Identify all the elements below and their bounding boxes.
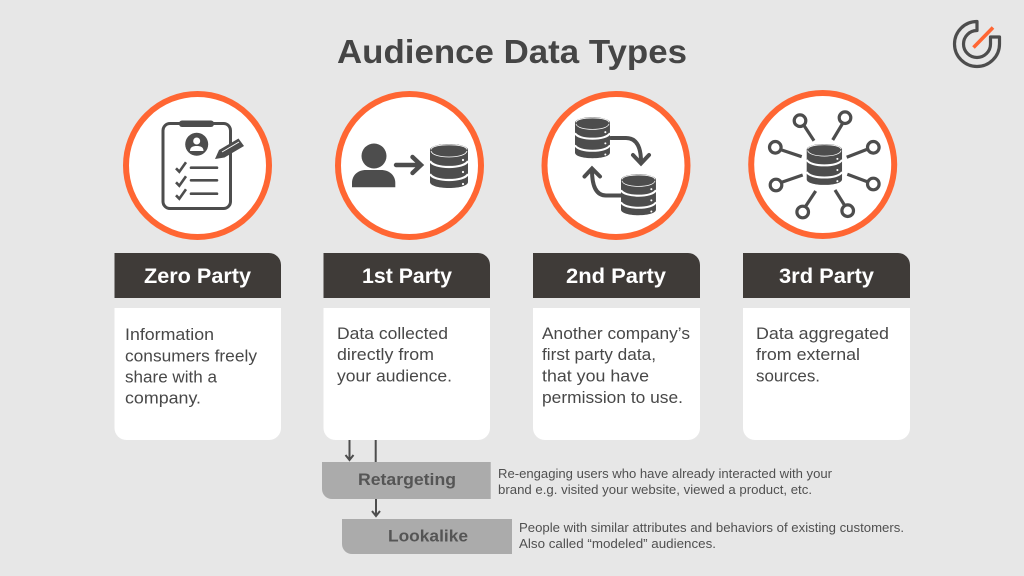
panel: lookalike [342,519,512,554]
text block: lookalike description: People with similar attributes and behaviors of existing customers. [519,521,904,535]
text block: 1st party description: Data collected [337,325,448,343]
text block: lookalike description: Also called “modeled” audiences. [519,537,716,551]
arrow: retargeting to lookalike [372,499,380,516]
heading: zero party: Zero Party [144,265,251,288]
title: Audience Data Types [337,33,687,70]
text block: 2nd party description: Another company’s [542,325,690,343]
heading: 3rd party [743,253,910,298]
text block: 3rd party description: Data aggregated [756,325,889,343]
text block: 2nd party description: permission to use. [542,389,683,407]
text block: retargeting description: brand e.g. visited your website, viewed a product, etc. [498,483,812,497]
text block: zero party description: company. [125,390,201,408]
text block: zero party description: share with a [125,369,218,387]
text block: 2nd party description: that you have [542,368,649,386]
panel: retargeting [322,462,491,499]
text block: zero party description [114,308,281,440]
text block: 3rd party description [743,308,910,440]
text block: zero party description: consumers freely [125,348,258,366]
panel: 2nd party [533,94,700,440]
arrow: 1st party to retargeting [346,440,354,460]
text block: lookalike description [519,521,904,551]
text block: retargeting description: Re-engaging users who have already interacted with your [498,467,832,481]
text block: 1st party description [324,308,490,440]
arrow: connector line from 1st party [375,440,377,462]
text block: retargeting description [498,467,832,497]
icon: clipboard in orange circle [126,94,269,237]
text block: 3rd party description: sources. [756,368,820,386]
panel: lookalike: Lookalike [388,527,468,546]
icon: company logo [954,22,1000,66]
heading: 2nd party: 2nd Party [566,265,666,288]
heading: 3rd party: 3rd Party [779,265,874,288]
icon: exchanging databases in orange circle [544,94,688,237]
text block: 3rd party description: from external [756,346,860,364]
text block: 2nd party description [533,308,700,440]
icon: database hub with nodes in orange circle [751,93,894,236]
panel: 1st party [324,94,490,440]
text block: 1st party description: directly from [337,346,434,364]
text block: 1st party description: your audience. [337,368,452,386]
panel: retargeting: Retargeting [358,470,456,489]
panel: 3rd party [743,93,910,440]
heading: 2nd party [533,253,700,298]
heading: 1st party [324,253,490,298]
text block: zero party description: Information [125,326,214,344]
heading: zero party [114,253,281,298]
heading: 1st party: 1st Party [362,265,452,288]
icon: person to database in orange circle [338,94,481,237]
panel: zero party [114,94,281,440]
text block: 2nd party description: first party data, [542,346,656,364]
